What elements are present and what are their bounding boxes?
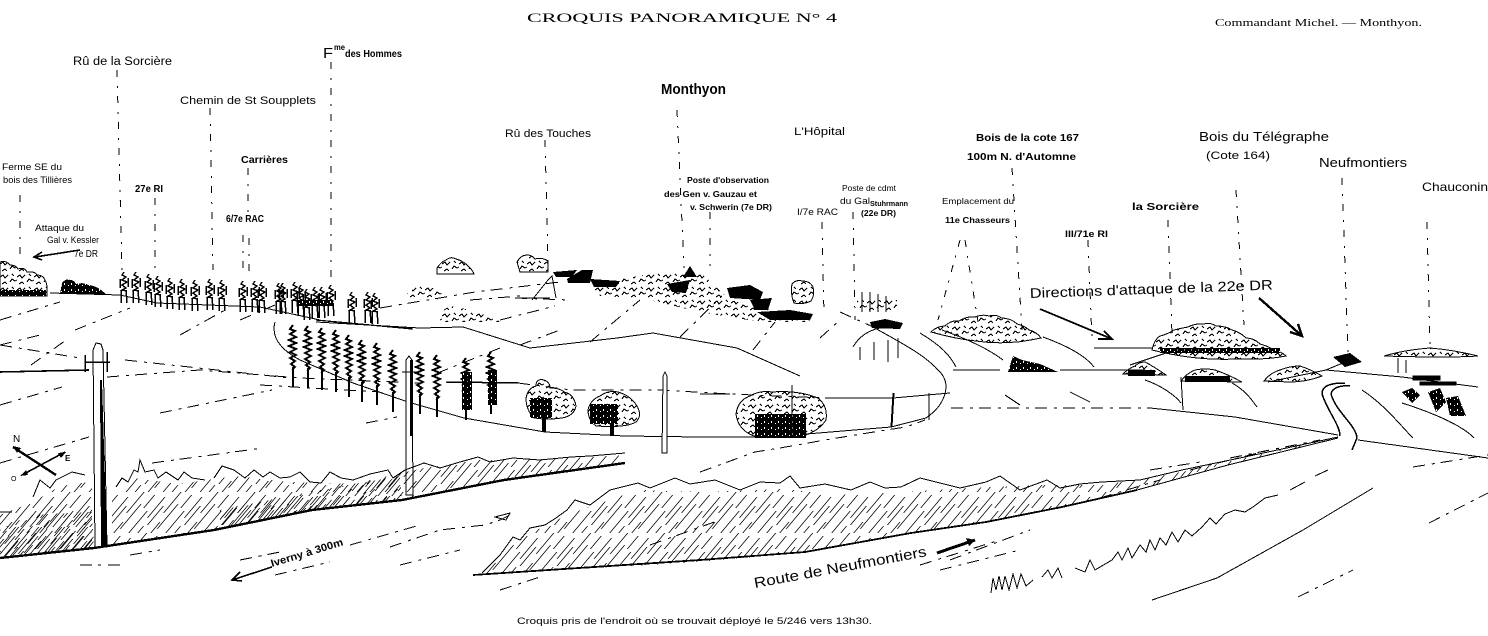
label: L'Hopital: L'Hôpital [794,126,845,138]
caption: Croquis pris de l'endroit où se trouvait déployé le 5/246 vers 13h30. [517,616,872,627]
lower verge scribble [991,470,1328,593]
label: I/7e RAC: I/7e RAC [797,207,839,217]
label: Attaque du: Attaque du [35,223,84,234]
label: me superscript: me [334,43,346,52]
far horizon left [0,261,413,345]
trees behind bend [857,300,897,312]
label: Chemin de St Soupplets: Chemin de St Soupplets [180,95,317,107]
big bush [736,385,826,438]
label: Ru de la Sorciere: Rû de la Sorcière [73,56,172,68]
arrow: attack direction 2 [1259,298,1302,336]
label: Poste d'observation: Poste d'observation [687,175,769,185]
soldiers in line on the ridge [120,272,379,324]
Neufmontiers village [1333,353,1362,367]
labels: left side [2,43,402,260]
round tree 2 [588,392,640,436]
telegraph wires and field lines [0,338,825,463]
roofs [553,266,813,320]
S-shaped road [1322,383,1357,450]
label: Ru des Touches: Rû des Touches [505,128,592,140]
road label: Iverny: Iverny à 300m [269,536,345,570]
label: Monthyon: Monthyon [661,82,726,98]
label: 22e DR: (22e DR) [861,209,896,218]
label: Neufmontiers: Neufmontiers [1319,155,1408,170]
compass: O [11,476,17,483]
Chauconin ridge [1384,348,1478,357]
thick ground line [0,463,625,558]
trees above village [437,255,548,274]
compass: E [65,454,71,463]
label: Bois du Telegraphe: Bois du Télégraphe [1199,129,1329,144]
telegraph pole 1 [85,343,110,547]
label: Cote 164: (Cote 164) [1206,150,1270,162]
round tree 1 [526,380,576,432]
label: 11e Chasseurs: 11e Chasseurs [945,215,1010,225]
label: Ferme SE du: Ferme SE du [2,162,62,172]
small roofs and trees at right [1398,358,1456,385]
hill ground lines [420,327,800,376]
road label: Route de Neufmontiers: Route de Neufmontiers [753,544,928,592]
central embankment hatching [473,437,1338,575]
wood: bois du telegraphe [1152,323,1286,359]
label: Bois de la cote 167: Bois de la cote 167 [976,132,1079,144]
author line: Commandant Michel. — Monthyon. [1215,18,1422,29]
label: la Sorciere: la Sorcière [1132,202,1200,213]
label: III/71e RI: III/71e RI [1065,229,1108,239]
dashed sight lines [20,62,1430,352]
label: Stuhrmann: Stuhrmann [870,199,908,208]
Monthyon village [380,255,880,376]
bush: small hedge [60,279,106,294]
road label: Route de Neufmontiers [753,538,975,592]
label: bois des Tillieres: bois des Tillières [3,175,73,185]
labels: right side [942,129,1488,339]
label: 27e RI: 27e RI [135,184,163,195]
label: observation line 3: v. Schwerin (7e DR) [690,203,772,212]
label: Directions d'attaque: Directions d'attaque de la 22e DR [1030,277,1273,301]
road surface lines [75,420,1488,600]
label: observation line 2: des Gen v. Gauzau et [664,190,757,199]
hill lines [920,330,1478,438]
compass [11,434,71,483]
label: des Hommes: des Hommes [345,49,402,60]
poplars row [289,325,497,420]
label: general: Gal v. Kessler [47,235,99,246]
label: Emplacement du: Emplacement du [942,197,1014,206]
compass: N [13,434,20,445]
arrow: attack direction 1 [1040,309,1112,339]
fence posts near the road bend [853,328,898,362]
label: 7e DR: 7e DR [74,249,98,260]
village band of houses [590,272,815,322]
label: Poste de commandement: Poste de cdmt [842,183,897,193]
large field outline with poplars [274,292,946,438]
fence posts by road [700,393,950,427]
right hills and woods [920,315,1488,458]
label: du General: du Gal [840,196,870,206]
bush: left wood [0,261,47,296]
label: 6/7e RAC: 6/7e RAC [226,214,264,225]
dark bushes [1008,356,1322,382]
road label: Iverny [232,536,345,581]
telegraph pole 2 [402,356,418,495]
label: Carrieres: Carrières [241,154,288,166]
label: 100m N. d'Automne: 100m N. d'Automne [967,152,1077,163]
arrow: attack to the west [34,250,80,260]
wood: cote 167 [931,315,1041,343]
roof of the farm [870,319,903,329]
telegraph pole 3 [662,372,667,453]
title: CROQUIS PANORAMIQUE N° 4 [527,10,838,25]
left embankment hatching [0,453,625,558]
labels: centre [505,82,908,218]
label: Chauconin: Chauconin [1422,180,1488,194]
label: Ferme: F [323,45,333,62]
